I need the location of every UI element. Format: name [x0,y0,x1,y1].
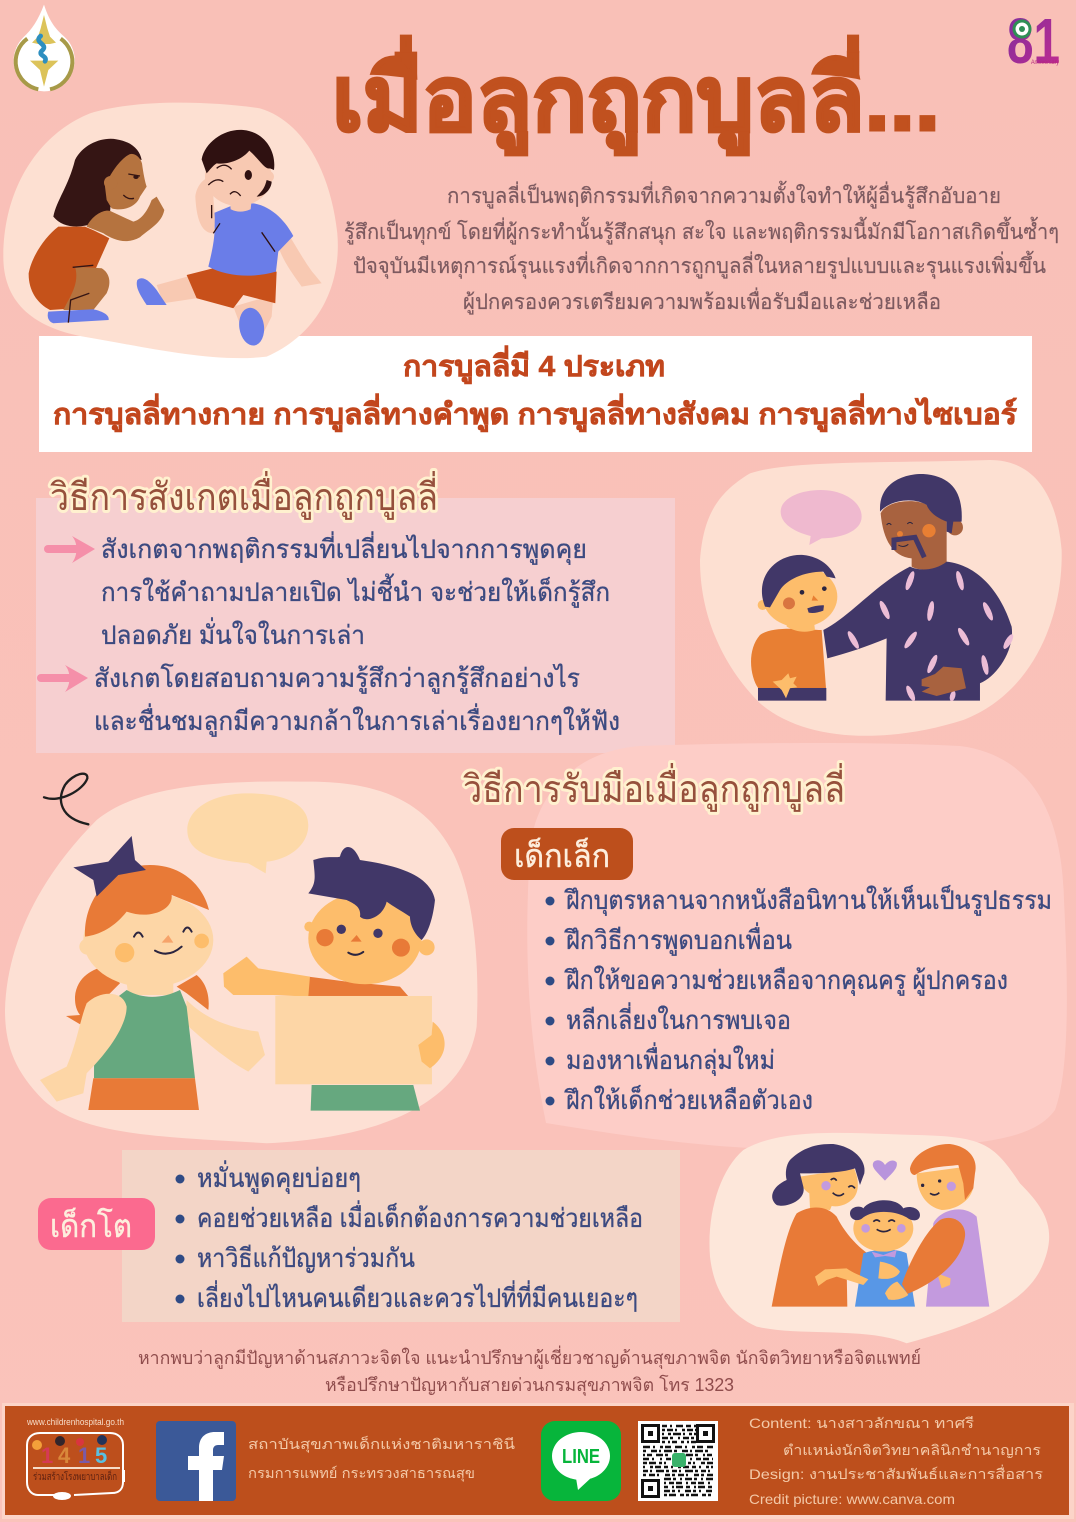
illustration: girl comforting crying boy [3,103,338,358]
illustration: family hugging [709,1133,1049,1343]
badge: young children: เด็กเล็ก [514,837,610,874]
text: institute name [248,1435,516,1482]
panel: observation [36,471,675,753]
logo: children hospital 1415: www.childrenhospital.go.th [26,1417,124,1427]
arrow: second point [41,665,88,692]
heart [873,1160,897,1181]
heading: how to observe: วิธีการสังเกตเมื่อลูกถูกบูลลี่ [50,471,438,520]
panel: older children list: เลี่ยงไปไหนคนเดียวและควรไปที่ที่มีคนเยอะๆ [197,1280,638,1313]
list: young children: ฝึกให้ขอความช่วยเหลือจากคุณครู ผู้ปกครอง [564,965,1008,996]
child [855,1250,915,1307]
father [926,1209,989,1307]
decorative curl [44,774,88,824]
logo: hospital emblem [14,5,75,91]
white banner: four types: การบูลลี่มี 4 ประเภท [403,345,665,384]
text: first observation point: การใช้คำถามปลายเปิด ไม่ชี้นำ จะช่วยให้เด็กรู้สึก [101,573,610,608]
closing note: หากพบว่าลูกมีปัญหาด้านสภาวะจิตใจ แนะนำปรึกษาผู้เชี่ยวชาญด้านสุขภาพจิต นักจิตวิทยาหรือจิตแพทย์ [138,1345,921,1369]
boy [751,629,826,688]
intro paragraph [344,181,1059,315]
credits: Content: นางสาวลักขณา ทาศรี [749,1415,975,1431]
text: institute name: สถาบันสุขภาพเด็กแห่งชาติมหาราชินี [248,1435,516,1453]
white banner: four types: การบูลลี่ทางกาย การบูลลี่ทางคำพูด การบูลลี่ทางสังคม การบูลลี่ทางไซเบอร์ [53,393,1017,432]
list: young children: มองหาเพื่อนกลุ่มใหม่ [566,1042,775,1076]
panel: older children list: หมั่นพูดคุยบ่อยๆ [197,1160,361,1194]
panel: older children list: คอยช่วยเหลือ เมื่อเด็กต้องการความช่วยเหลือ [197,1200,643,1233]
intro paragraph: ปัจจุบันมีเหตุการณ์รุนแรงที่เกิดจากการถูกบูลลี่ในหลายรูปแบบและรุนแรงเพิ่มขึ้น [353,251,1046,279]
badge: older children: เด็กโต [50,1207,132,1244]
logo: children hospital 1415 [26,1417,125,1500]
panel: older children list [122,1150,680,1322]
credits [749,1415,1044,1507]
logo: children hospital 1415: 4 [58,1443,71,1468]
footer band [2,1403,1074,1519]
logo: children hospital 1415: 1 [41,1443,53,1468]
boy [307,977,412,1000]
panel: older children list: หาวิธีแก้ปัญหาร่วมกัน [197,1243,415,1273]
girl [53,139,142,227]
badge: young children [501,828,633,880]
panel: blob behind coping section [527,743,1067,1150]
credits: Design: งานประชาสัมพันธ์และการสื่อสาร [749,1465,1044,1482]
credits: ตำแหน่งนักจิตวิทยาคลินิกชำนาญการ [783,1442,1042,1458]
heading: how to cope: วิธีการรับมือเมื่อลูกถูกบูลลี่ [463,763,845,812]
hands on mother [815,1268,868,1286]
list: young children [546,884,1052,1115]
illustration: father and son [700,460,1062,736]
text: first observation point: สังเกตจากพฤติกรรมที่เปลี่ยนไปจากการพูดคุย [101,531,587,565]
closing note: หรือปรึกษาปัญหากับสายด่วนกรมสุขภาพจิต โทร 1323 [325,1374,734,1396]
logo: 81 anniversary: Anniversary [1031,60,1059,66]
text: institute name: กรมการแพทย์ กระทรวงสาธารณสุข [248,1465,475,1482]
logo: children hospital 1415: 5 [95,1443,107,1468]
credits: Credit picture: www.canva.com [749,1491,955,1507]
speech bubble [187,793,308,873]
list: young children: ฝึกวิธีการพูดบอกเพื่อน [564,922,792,956]
girl [66,966,209,1024]
qr code [638,1421,718,1501]
intro paragraph: ผู้ปกครองควรเตรียมความพร้อมเพื่อรับมือและช่วยเหลือ [463,287,941,315]
list: young children: ฝึกให้เด็กช่วยเหลือตัวเอง [564,1084,813,1115]
mother [800,1168,858,1210]
icon: facebook [156,1421,236,1501]
text: first observation point [101,531,610,650]
intro paragraph: การบูลลี่เป็นพฤติกรรมที่เกิดจากความตั้งใจทำให้ผู้อื่นรู้สึกอับอาย [447,181,1001,209]
logo: children hospital 1415: ร่วมสร้างโรงพยาบาลเด็ก [33,1469,117,1483]
text: second observation point [94,663,620,737]
icon: line: LINE [562,1446,600,1468]
closing note [138,1345,921,1396]
white banner: four types [39,336,1032,452]
arrow: first point [48,536,95,563]
list: young children: หลีกเลี่ยงในการพบเจอ [566,1002,791,1035]
text: second observation point: และชื่นชมลูกมีความกล้าในการเล่าเรื่องยากๆให้ฟัง [94,703,620,737]
speech bubble [781,490,862,545]
man [881,501,947,570]
text: first observation point: ปลอดภัย มั่นใจในการเล่า [101,617,365,650]
intro paragraph: รู้สึกเป็นทุกข์ โดยที่ผู้กระทำนั้นรู้สึกสนุก สะใจ และพฤติกรรมนี้มักมีโอกาสเกิดขึ้นซ้ำๆ [344,217,1059,245]
boy [157,275,273,333]
badge: older children [38,1198,155,1250]
text: second observation point: สังเกตโดยสอบถามความรู้สึกว่าลูกรู้สึกอย่างไร [94,663,580,694]
illustration: two children talking [5,781,477,1143]
icon: line [541,1421,621,1501]
title: เมื่อลูกถูกบูลลี่... [332,36,940,155]
logo: children hospital 1415: 1 [78,1443,90,1468]
